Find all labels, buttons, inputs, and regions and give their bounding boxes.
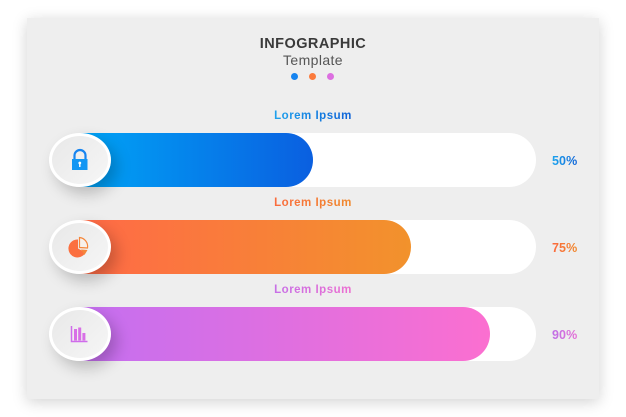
bar: row 1 50% [80,133,313,187]
bar: row 3 90% [80,307,490,361]
percent: row 3: 90% [552,328,577,342]
subtitle: Template [283,52,343,68]
icon: pie chart [68,236,88,258]
title: INFOGRAPHIC [260,36,366,52]
bar: row 2 75% [80,220,411,274]
label: row 3: Lorem Ipsum [274,284,352,296]
track: row 2 [60,220,536,274]
label: row 2: Lorem Ipsum [274,197,352,209]
track: row 1 [60,133,536,187]
percent: row 2: 75% [552,241,577,255]
track: row 3 [60,307,536,361]
icon: bar chart [70,326,88,342]
knob: row 1 [49,133,111,187]
three coloured dots [291,73,334,80]
knob: row 2 [49,220,111,274]
label: row 1: Lorem Ipsum [274,110,352,122]
knob: row 3 [49,307,111,361]
icon: padlock [72,148,88,170]
percent: row 1: 50% [552,154,577,168]
